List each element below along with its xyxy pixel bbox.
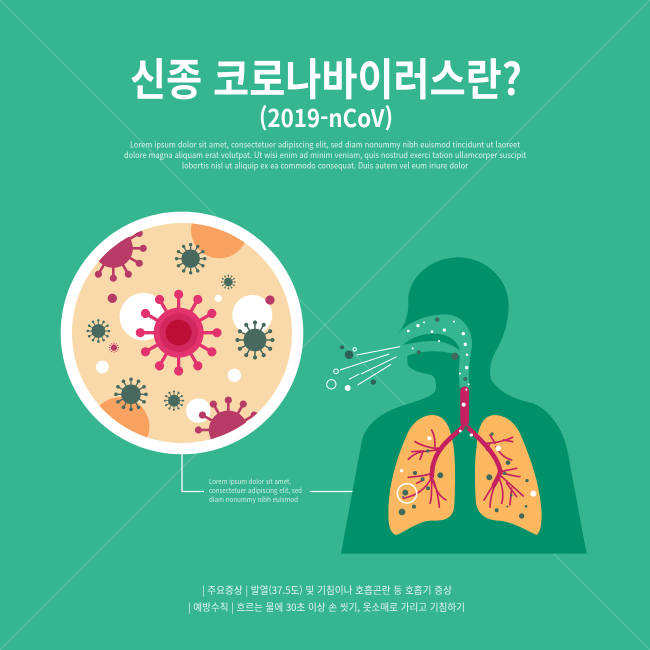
magnified tissue background bbox=[72, 223, 292, 443]
callout text: consectetuer adipiscing elit, sed bbox=[209, 485, 302, 495]
subtitle: (2019-nCoV) bbox=[259, 100, 393, 135]
callout connector bbox=[182, 454, 397, 492]
highlighted alveolus ring bbox=[397, 484, 417, 503]
intro text block: dolore magna aliquam erat volutpat. Ut wisi enim ad minim veniam, quis nostrud exerci tation ullamcorper suscipit bbox=[124, 149, 527, 161]
intro text block: Lorem ipsum dolor sit amet, consectetuer adipiscing elit, sed diam nonummy nibh euismod tincidunt ut laoreet bbox=[130, 138, 521, 150]
bottom notes bbox=[188, 582, 465, 614]
airway bbox=[397, 314, 472, 387]
title: 신종 코로나바이러스란? bbox=[130, 44, 522, 108]
trachea and bronchi bbox=[403, 391, 523, 507]
panel: magnified virus circle bbox=[61, 202, 303, 463]
intro text block bbox=[124, 138, 527, 172]
virus field bbox=[86, 223, 275, 440]
body silhouette bbox=[341, 257, 587, 554]
callout text: Lorem ipsum dolor sit amet, bbox=[209, 476, 291, 486]
exhaled droplets bbox=[327, 345, 400, 391]
callout text: diam nonummy nibh euismod bbox=[209, 494, 298, 504]
magnifier white ring bbox=[61, 212, 303, 454]
airway and lung particles bbox=[399, 317, 536, 519]
main symptoms: | 주요증상 | 발열(37.5도) 및 기침이나 호흡곤란 등 호흡기 증상 bbox=[202, 582, 452, 597]
callout text bbox=[209, 476, 302, 504]
right lung bbox=[475, 415, 542, 535]
palate bbox=[403, 334, 460, 351]
main coronavirus bbox=[136, 290, 222, 376]
prevention rules: | 예방수칙 | 흐르는 물에 30초 이상 손 씻기, 옷소매로 가리고 기침하기 bbox=[188, 599, 465, 614]
left lung bbox=[388, 415, 455, 535]
panel: human respiratory diagram bbox=[327, 257, 587, 554]
intro text block: lobortis nisl ut aliquip ex ea commodo consequat. Duis autem vel eum iriure dolor bbox=[182, 160, 469, 172]
